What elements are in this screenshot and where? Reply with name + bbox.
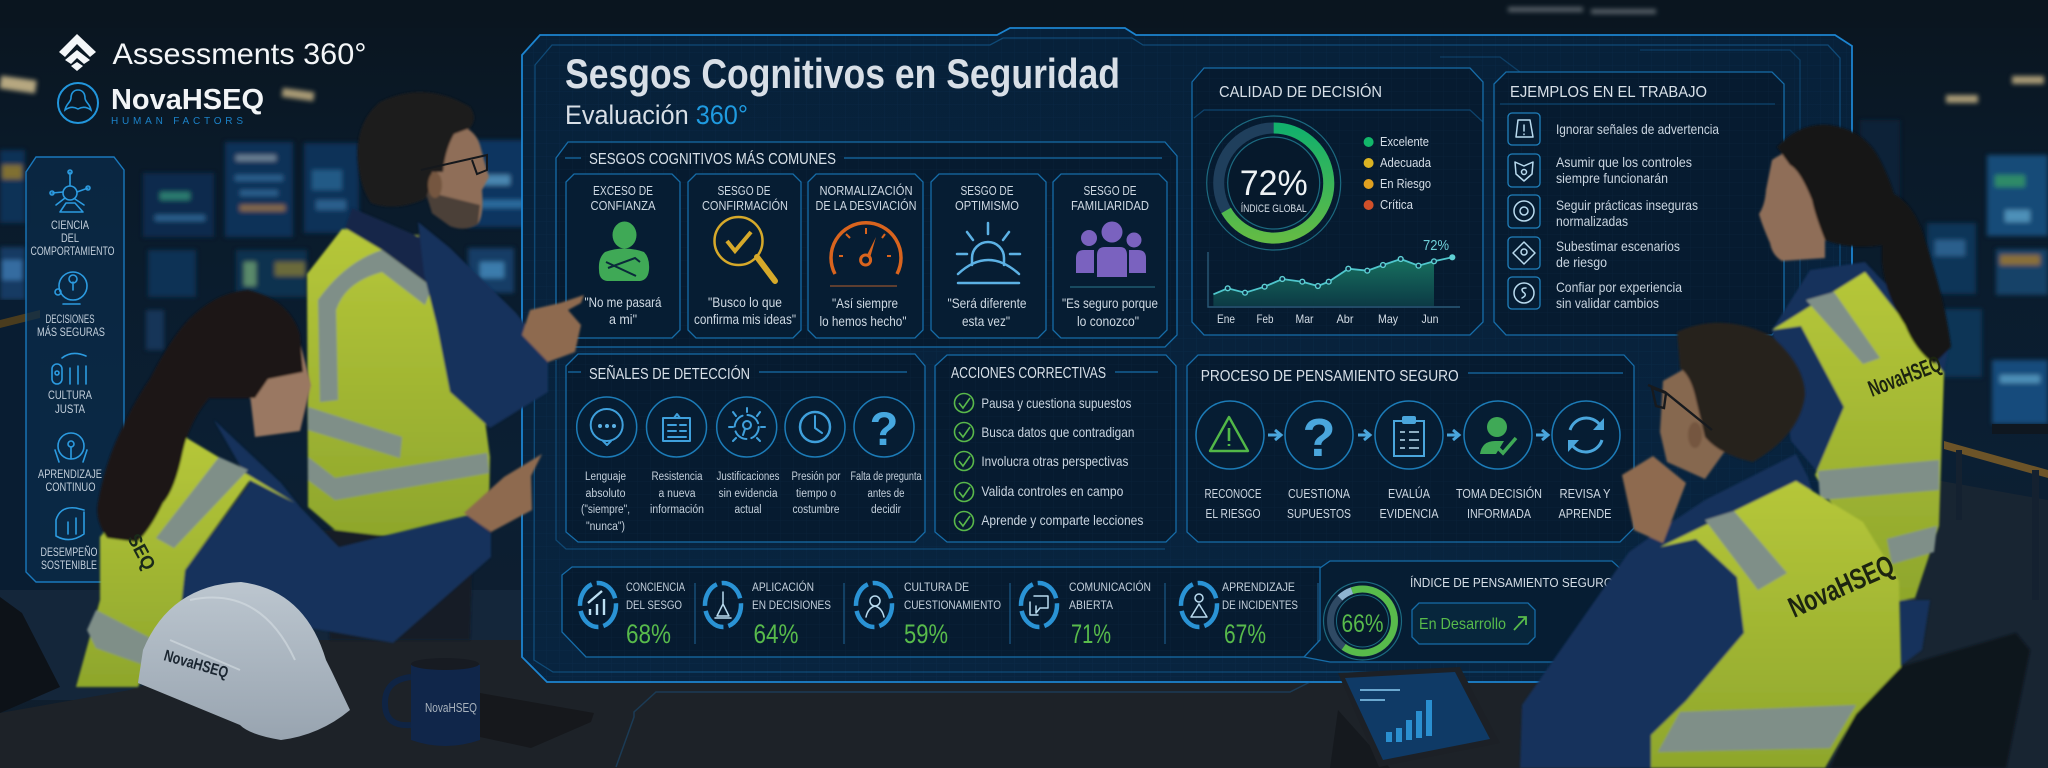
icon: just culture xyxy=(52,353,86,384)
signal: presion por tiempo xyxy=(785,397,845,516)
step: evalua evidencia xyxy=(1375,401,1443,521)
card: sesgo de familiaridad: "Es seguro porque xyxy=(1062,295,1158,311)
logo: Assessments 360: Assessments 360° xyxy=(112,38,366,71)
icon: continuous learning xyxy=(55,433,87,462)
line chart: 72% xyxy=(1423,237,1449,254)
step: reconoce el riesgo: EL RIESGO xyxy=(1206,506,1260,521)
heading: indice: ÍNDICE DE PENSAMIENTO SEGURO xyxy=(1410,575,1613,590)
signal: justificaciones sin evidencia xyxy=(716,397,780,516)
text: decisiones mas seguras: DECISIONES xyxy=(46,314,95,326)
text: cultura justa: JUSTA xyxy=(55,404,85,416)
kpi: conciencia del sesgo: CONCIENCIA xyxy=(626,582,685,594)
signal: justificaciones sin evidencia: actual xyxy=(734,504,762,516)
signal: resistencia a nueva informacion xyxy=(646,397,706,516)
list: corrective actions xyxy=(954,394,1143,530)
legend: En Riesgo xyxy=(1380,177,1431,191)
example 4: de riesgo xyxy=(1556,254,1607,270)
card: exceso de confianza: CONFIANZA xyxy=(590,198,656,213)
card: exceso de confianza xyxy=(566,174,680,338)
card: sesgo de confirmacion: "Busco lo que xyxy=(708,294,782,310)
example 5 xyxy=(1508,277,1682,311)
icon: magnifier with check xyxy=(714,217,775,281)
heading: proceso: PROCESO DE PENSAMIENTO SEGURO xyxy=(1201,368,1459,385)
kpi: aprendizaje de incidentes: APRENDIZAJE xyxy=(1222,582,1295,594)
list: corrective actions: Involucra otras perspectivas xyxy=(981,453,1128,469)
step: reconoce el riesgo xyxy=(1196,401,1264,521)
legend: Crítica xyxy=(1380,198,1413,212)
legend: Adecuada xyxy=(1380,156,1431,170)
badge: en desarrollo xyxy=(1412,603,1535,644)
card: sesgo de optimismo xyxy=(931,174,1046,338)
card: exceso de confianza: a mi" xyxy=(609,311,637,327)
mug xyxy=(385,658,480,746)
text: desempeno sostenible: SOSTENIBLE xyxy=(41,560,97,572)
signal: presion por tiempo: Presión por xyxy=(792,471,841,483)
panel: KPI bar xyxy=(562,567,1328,657)
helmet: NovaHSEQ xyxy=(162,648,230,682)
icon: sustainable performance xyxy=(56,508,84,540)
signal: lenguaje absoluto: absoluto xyxy=(586,488,626,500)
text: ciencia del comportamiento: DEL xyxy=(61,233,79,245)
step: cuestiona supuestos xyxy=(1285,401,1353,521)
text: decisiones mas seguras xyxy=(37,314,105,339)
card: exceso de confianza: EXCESO DE xyxy=(593,183,653,198)
text: cultura justa xyxy=(48,390,92,416)
icon: sunrise xyxy=(957,223,1020,283)
card: sesgo de familiaridad: SESGO DE xyxy=(1084,183,1137,198)
text: desempeno sostenible xyxy=(40,546,98,572)
list: corrective actions: Valida controles en campo xyxy=(981,483,1124,499)
card: normalizacion de la desviacion: DE LA DESVIACIÓN xyxy=(816,198,916,213)
mug: NovaHSEQ xyxy=(425,700,477,715)
kpi: aprendizaje de incidentes: 67% xyxy=(1224,619,1266,649)
panel: proceso de pensamiento seguro xyxy=(1187,355,1634,542)
donut chart: indice global 72%: 72% xyxy=(1240,164,1308,203)
step: revisa y aprende xyxy=(1552,401,1620,521)
kpi: comunicacion abierta: COMUNICACIÓN xyxy=(1069,581,1151,594)
kpi: cultura de cuestionamiento: CULTURA DE xyxy=(904,582,969,594)
line chart: May xyxy=(1378,312,1398,326)
title: Sesgos Cognitivos en Seguridad xyxy=(565,50,1120,97)
signal: lenguaje absoluto: ("siempre", xyxy=(581,504,630,516)
list: corrective actions: Pausa y cuestiona supuestos xyxy=(981,395,1131,411)
card: sesgo de confirmacion: SESGO DE xyxy=(718,183,771,198)
text: ciencia del comportamiento: COMPORTAMIENTO xyxy=(30,246,115,258)
kpi: aprendizaje de incidentes xyxy=(1181,582,1298,649)
example 3 xyxy=(1508,195,1698,229)
card: sesgo de optimismo: OPTIMISMO xyxy=(955,198,1019,213)
text: aprendizaje continuo: CONTINUO xyxy=(46,482,96,494)
example 4: Subestimar escenarios xyxy=(1556,238,1680,254)
card: sesgo de familiaridad: lo conozco" xyxy=(1077,313,1139,329)
card: exceso de confianza: "No me pasará xyxy=(584,294,662,310)
card: normalizacion de la desviacion xyxy=(808,174,923,338)
logo: NovaHSEQ Human Factors xyxy=(58,83,264,127)
signal: presion por tiempo: costumbre xyxy=(792,504,840,516)
signal: falta de pregunta: decidir xyxy=(871,504,901,516)
reflected lines below panel xyxy=(616,682,1310,767)
person: seated man right xyxy=(1520,323,2030,768)
panel: indice de pensamiento seguro xyxy=(1304,561,1624,662)
heading: acciones: ACCIONES CORRECTIVAS xyxy=(951,365,1106,382)
left chair xyxy=(0,597,60,713)
step: cuestiona supuestos: CUESTIONA xyxy=(1288,486,1350,501)
arrow 1 xyxy=(1268,430,1281,440)
step: evalua evidencia: EVALÚA xyxy=(1388,486,1430,501)
icon: group of people xyxy=(1076,222,1146,277)
kpi: aplicacion en decisiones: 64% xyxy=(754,619,798,649)
panel: ejemplos en el trabajo xyxy=(1440,50,1800,335)
kpi: comunicacion abierta: ABIERTA xyxy=(1069,600,1113,612)
kpi: comunicacion abierta xyxy=(1021,581,1151,649)
list: corrective actions: Aprende y comparte lecciones xyxy=(981,512,1143,528)
line chart: Jun xyxy=(1422,312,1438,326)
donut chart: indice global 72%: ÍNDICE GLOBAL xyxy=(1241,202,1307,215)
example 2: Asumir que los controles xyxy=(1556,154,1692,170)
text: decisiones mas seguras: MÁS SEGURAS xyxy=(37,326,105,339)
step: toma decision informada: INFORMADA xyxy=(1467,506,1531,521)
card: sesgo de familiaridad: FAMILIARIDAD xyxy=(1071,198,1149,213)
kpi: conciencia del sesgo: DEL SESGO xyxy=(626,600,682,612)
kpi: aprendizaje de incidentes: DE INCIDENTES xyxy=(1222,600,1298,612)
text: desempeno sostenible: DESEMPEÑO xyxy=(40,546,98,559)
signal: falta de pregunta: Falta de pregunta xyxy=(850,471,922,483)
signal: falta de pregunta: ? xyxy=(870,402,898,455)
step: evalua evidencia: EVIDENCIA xyxy=(1380,506,1439,521)
main holographic panel xyxy=(522,28,1852,682)
text: cultura justa: CULTURA xyxy=(48,390,92,402)
line chart: Mar xyxy=(1296,312,1314,326)
signal: lenguaje absoluto: "nunca") xyxy=(586,521,625,533)
signal: presion por tiempo: tiempo o xyxy=(796,488,836,500)
icon: behavioural science xyxy=(50,170,90,212)
vest text: SEQ xyxy=(123,530,159,574)
legend: Excelente xyxy=(1380,135,1429,149)
person: seated woman pointing xyxy=(76,290,542,687)
line chart xyxy=(1208,237,1460,326)
card: sesgo de confirmacion: CONFIRMACIÓN xyxy=(702,198,788,213)
step: cuestiona supuestos: ? xyxy=(1302,408,1336,468)
heading: ejemplos: EJEMPLOS EN EL TRABAJO xyxy=(1510,84,1707,101)
example 3: normalizadas xyxy=(1556,213,1628,229)
donut chart: 66%: 66% xyxy=(1342,610,1384,638)
person: standing man pointing xyxy=(307,92,584,640)
list: corrective actions: Busca datos que contradigan xyxy=(981,424,1134,440)
arrow 3 xyxy=(1447,430,1459,440)
signal: justificaciones sin evidencia: sin evidencia xyxy=(718,488,778,500)
line chart: Feb xyxy=(1256,312,1274,326)
signal: resistencia a nueva informacion: Resistencia xyxy=(652,471,703,483)
example 1 xyxy=(1508,113,1719,145)
example 2: siempre funcionarán xyxy=(1556,170,1668,186)
donut chart: indice global 72% xyxy=(1207,116,1341,250)
card: sesgo de confirmacion xyxy=(688,174,801,338)
card: sesgo de optimismo: "Será diferente xyxy=(948,295,1027,311)
text: aprendizaje continuo xyxy=(38,469,102,494)
helmet xyxy=(138,582,350,740)
example 1: Ignorar señales de advertencia xyxy=(1556,121,1719,137)
panel: senales de deteccion xyxy=(556,354,1165,549)
text: ciencia del comportamiento xyxy=(30,220,115,258)
step: toma decision informada: TOMA DECISIÓN xyxy=(1456,486,1542,501)
icon: orange gauge xyxy=(830,223,901,286)
kpi: aplicacion en decisiones xyxy=(705,581,831,649)
subtitle: Evaluación 360° xyxy=(565,100,748,130)
signal: justificaciones sin evidencia: Justificaciones xyxy=(716,471,780,483)
card: normalizacion de la desviacion: "Así siempre xyxy=(832,295,898,311)
panel: acciones correctivas xyxy=(935,355,1176,542)
person: standing woman right: NovaHSEQ xyxy=(1864,350,1945,402)
donut chart: 66% xyxy=(1324,582,1402,660)
logo: NovaHSEQ Human Factors: NovaHSEQ xyxy=(111,84,264,116)
person: standing woman right xyxy=(1759,125,1951,667)
panel: calidad de decision xyxy=(1192,68,1483,335)
example 5: Confiar por experiencia xyxy=(1556,279,1682,295)
card: sesgo de confirmacion: confirma mis ideas" xyxy=(694,311,796,327)
panel: sesgos cognitivos mas comunes xyxy=(556,142,1177,347)
heading: senales: SEÑALES DE DETECCIÓN xyxy=(589,363,750,383)
badge: en desarrollo: En Desarrollo xyxy=(1419,616,1506,633)
person: seated man right: NovaHSEQ xyxy=(1784,550,1899,624)
arrow 4 xyxy=(1536,430,1548,440)
line chart: Ene xyxy=(1217,312,1235,326)
signal: falta de pregunta xyxy=(850,397,922,516)
card: sesgo de optimismo: SESGO DE xyxy=(960,183,1014,198)
step: reconoce el riesgo: RECONOCE xyxy=(1204,486,1262,501)
arrow 2 xyxy=(1358,430,1370,440)
step: toma decision informada xyxy=(1456,401,1542,521)
kpi: cultura de cuestionamiento: CUESTIONAMIENTO xyxy=(904,600,1001,612)
heading: calidad: CALIDAD DE DECISIÓN xyxy=(1219,82,1382,101)
icon: person arms crossed xyxy=(599,222,649,281)
step: revisa y aprende: APRENDE xyxy=(1558,506,1612,521)
logo: NovaHSEQ Human Factors: HUMAN FACTORS xyxy=(111,116,243,127)
kpi: conciencia del sesgo xyxy=(580,582,685,649)
left floating panel: human factors pillars xyxy=(26,157,124,582)
card: normalizacion de la desviacion: NORMALIZACIÓN xyxy=(820,183,912,198)
signal: resistencia a nueva informacion: información xyxy=(650,504,704,516)
card: normalizacion de la desviacion: lo hemos hecho" xyxy=(820,313,907,329)
notebook xyxy=(480,693,594,748)
kpi: aplicacion en decisiones: EN DECISIONES xyxy=(752,600,831,612)
step: cuestiona supuestos: SUPUESTOS xyxy=(1287,506,1351,521)
signal: lenguaje absoluto xyxy=(577,397,637,533)
kpi: comunicacion abierta: 71% xyxy=(1071,619,1111,649)
card: sesgo de familiaridad xyxy=(1053,174,1167,338)
example 3: Seguir prácticas inseguras xyxy=(1556,197,1698,213)
kpi: cultura de cuestionamiento: 59% xyxy=(904,619,948,649)
kpi: conciencia del sesgo: 68% xyxy=(626,619,671,649)
text: aprendizaje continuo: APRENDIZAJE xyxy=(38,469,102,481)
kpi: aplicacion en decisiones: APLICACIÓN xyxy=(752,581,814,594)
signal: falta de pregunta: antes de xyxy=(868,488,904,500)
example 4 xyxy=(1508,237,1680,270)
step: revisa y aprende: REVISA Y xyxy=(1560,486,1611,501)
card: sesgo de optimismo: esta vez" xyxy=(962,313,1010,329)
icon: safer decisions xyxy=(55,272,87,304)
example 2 xyxy=(1508,154,1692,187)
heading: sesgos: SESGOS COGNITIVOS MÁS COMUNES xyxy=(589,149,836,168)
left floor xyxy=(0,590,522,700)
legend xyxy=(1364,135,1431,212)
line chart: Abr xyxy=(1336,312,1354,326)
text: ciencia del comportamiento: CIENCIA xyxy=(51,220,89,232)
tablet xyxy=(1330,667,1500,768)
signal: lenguaje absoluto: Lenguaje xyxy=(585,471,626,483)
table xyxy=(0,640,1620,768)
signal: resistencia a nueva informacion: a nueva xyxy=(658,488,696,500)
example 5: sin validar cambios xyxy=(1556,295,1659,311)
kpi: cultura de cuestionamiento xyxy=(856,582,1001,649)
